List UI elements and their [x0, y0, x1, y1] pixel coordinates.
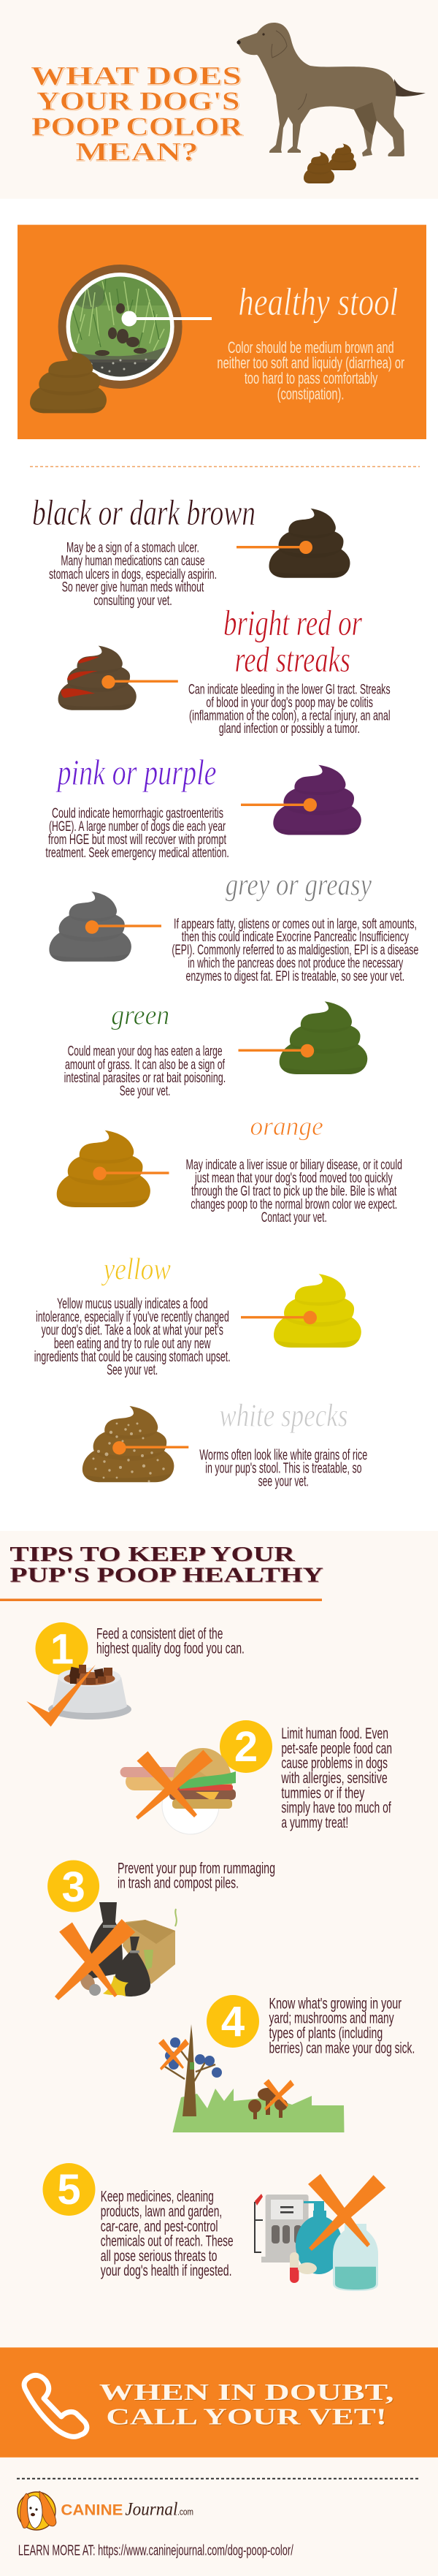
text block: white specks: see your vet. [258, 1473, 309, 1489]
text block: tip 2: with allergies, sensitive [281, 1770, 388, 1787]
heading: grey or greasy: grey or greasy [226, 869, 372, 903]
text block: tip 3 [118, 1860, 275, 1891]
icon: mushrooms [248, 2088, 288, 2119]
text block: green: See your vet. [120, 1083, 170, 1099]
icon: green poop [280, 1001, 367, 1074]
pointer: green poop [238, 1044, 314, 1057]
badge: 1 [35, 1622, 88, 1675]
text block: bright red [188, 681, 391, 737]
text block: black or dark brown: stomach ulcers in dogs, especially aspirin. [49, 566, 217, 582]
tip 4 [158, 1995, 415, 2132]
heading: bright red or red streaks: red streaks [235, 639, 350, 680]
icon: blue cleaner bottle [296, 2201, 342, 2274]
pointer: orange poop [93, 1166, 169, 1180]
text block: orange [185, 1157, 402, 1226]
text block: tip 3: in trash and compost piles. [118, 1874, 239, 1891]
heading: yellow: yellow [101, 1253, 171, 1287]
text block: green: Could mean your dog has eaten a large [68, 1044, 223, 1060]
pointer: grey poop [85, 920, 161, 934]
icon: yellow poop [274, 1274, 361, 1348]
icon: X on berries [158, 2039, 189, 2070]
text block: yellow: Yellow mucus usually indicates a food [57, 1296, 208, 1312]
heading: bright red or red streaks: bright red or [223, 602, 362, 643]
heading: tips [9, 1543, 323, 1587]
text block: tip 2: Limit human food. Even [281, 1725, 388, 1742]
icon: phone [24, 2375, 87, 2436]
icon: trash bags and box [77, 1902, 177, 1996]
heading: bright red or red streaks [223, 602, 362, 680]
text block: yellow: See your vet. [107, 1361, 158, 1378]
text block: pink or purple [45, 805, 229, 861]
text block: tip 1: Feed a consistent diet of the [96, 1625, 223, 1642]
text block: pink or purple: Could indicate hemorrhagic gastroenteritis [52, 805, 223, 821]
icon: grass [172, 2089, 345, 2132]
icon: dog food bowl [48, 1665, 131, 1720]
text block: green: amount of grass. It can also be a sign of [65, 1057, 225, 1073]
badge: 2 [220, 1720, 272, 1773]
heading: when in doubt [99, 2379, 394, 2429]
heading: when in doubt: CALL YOUR VET! [106, 2403, 387, 2429]
heading: black or dark brown: black or dark brown [32, 492, 256, 533]
text block: healthy stool [217, 338, 404, 403]
text: .com: .com [177, 2507, 193, 2518]
text block: yellow: intolerance, especially if you've recently changed [36, 1309, 229, 1326]
text block: tip 1: highest quality dog food you can. [96, 1641, 245, 1657]
title: WHAT DOES [31, 61, 242, 91]
icon: burger and hot dog [120, 1748, 236, 1834]
badge: 3: 3 [61, 1863, 85, 1911]
icon: orange check mark [26, 1665, 96, 1727]
text block: tip 2 [281, 1725, 392, 1831]
text block: white specks [199, 1446, 367, 1489]
text block: tip 5: Keep medicines, cleaning [101, 2189, 214, 2205]
text block: green: intestinal parasites or rat bait poisoning. [64, 1070, 226, 1086]
text block: grey or greasy [172, 916, 418, 984]
text block: tip 4: types of plants (including [269, 2025, 383, 2042]
pointer: red poop [101, 675, 178, 688]
text block: tip 2: tummies or if they [281, 1785, 365, 1801]
heading: when in doubt: WHEN IN DOUBT, [99, 2379, 394, 2405]
text block: pink or purple: (HGE). A large number of dogs die each year [49, 818, 226, 835]
pointer: black poop [237, 541, 312, 554]
icon: clear bottle [333, 2224, 378, 2291]
icon: pills [290, 2252, 317, 2283]
icon: healthy poop [30, 351, 107, 413]
pointer: healthy stool [121, 311, 212, 326]
icon: brown dog [237, 23, 426, 156]
icon: grey poop [49, 892, 131, 962]
text block: yellow: ingredients that could be causing stomach upset. [34, 1348, 231, 1365]
panel: orange [57, 1112, 402, 1226]
text block: green [64, 1044, 226, 1099]
tip 2 [120, 1720, 392, 1834]
text block: black or dark brown [49, 540, 217, 609]
icon: orange X [308, 2174, 385, 2251]
icon: red streak poop [58, 646, 137, 710]
icon: orange X [55, 1919, 135, 2000]
title [31, 61, 243, 167]
icon: X on mushrooms [264, 2079, 294, 2110]
badge: 5: 5 [57, 2166, 81, 2214]
text block: orange: Contact your vet. [261, 1209, 327, 1226]
text block: tip 5: all pose serious threats to [101, 2248, 217, 2265]
text block: healthy stool: (constipation). [277, 384, 345, 403]
text block: tip 2: a yummy treat! [281, 1815, 348, 1831]
text block: black or dark brown: May be a sign of a stomach ulcer. [66, 540, 199, 556]
text block: tip 5: your dog's health if ingested. [101, 2262, 232, 2279]
pointer: white specks poop [112, 1441, 188, 1455]
icon: purple poop [273, 765, 361, 835]
tip 1 [26, 1622, 245, 1727]
panel: green [64, 1000, 367, 1099]
badge: 5 [42, 2163, 95, 2216]
panel: black or dark brown [32, 492, 350, 609]
panel: header [0, 0, 438, 199]
panel: pink or purple [45, 752, 361, 861]
panel: healthy stool [18, 225, 426, 439]
icon: poop with white specks [82, 1406, 174, 1482]
panel: yellow [34, 1253, 361, 1378]
text block: black or dark brown: So never give human meds without [62, 580, 204, 596]
icon: black poop [269, 509, 350, 578]
heading: tips: PUP'S POOP HEALTHY [9, 1564, 323, 1587]
icon: orange poop [57, 1131, 150, 1207]
text block: tip 3: Prevent your pup from rummaging [118, 1860, 275, 1877]
title: MEAN? [75, 137, 199, 167]
heading: white specks: white specks [219, 1398, 347, 1434]
panel: white specks [82, 1398, 367, 1489]
panel: call your vet [0, 2347, 438, 2458]
heading: healthy stool: healthy stool [238, 280, 398, 324]
panel: tips background [0, 1531, 438, 2576]
icon: poop pile back [328, 143, 356, 170]
panel: bright red or red streaks [58, 602, 391, 737]
heading: pink or purple: pink or purple [55, 752, 217, 793]
tip 5 [42, 2163, 385, 2291]
text block: pink or purple: from HGE but most will recover with prompt [48, 832, 226, 848]
text block: tip 4 [269, 1995, 415, 2056]
heading: green: green [111, 1000, 169, 1030]
text: CANINE: CANINE [61, 2502, 123, 2519]
text block: yellow [34, 1296, 231, 1378]
text block: tip 5: car-care, and pest-control [101, 2218, 218, 2235]
tip 3 [47, 1860, 275, 2000]
badge: 3 [47, 1861, 99, 1912]
icon: basset hound [18, 2491, 56, 2530]
icon: fuel pump [255, 2194, 309, 2262]
icon: orange X [136, 1749, 213, 1820]
logo: Canine Journal [18, 2491, 193, 2530]
text block: bright red: gland infection or possibly a tumor. [219, 721, 360, 737]
title: YOUR DOG'S [36, 86, 239, 115]
heading: tips: TIPS TO KEEP YOUR [9, 1543, 296, 1566]
source link: LEARN MORE AT: https://www.caninejournal.com/dog-poop-color/ [18, 2543, 293, 2559]
text block: tip 5: chemicals out of reach. These [101, 2233, 234, 2249]
badge: 4: 4 [221, 1998, 245, 2045]
photo ring [58, 265, 182, 389]
icon: berry tree [165, 2024, 222, 2116]
text block: yellow: been eating and try to rule out any new [54, 1335, 211, 1352]
badge: 2: 2 [234, 1723, 258, 1771]
text block: pink or purple: treatment. Seek emergency medical attention. [45, 845, 229, 861]
text block: black or dark brown: Many human medications can cause [61, 553, 205, 569]
text block: tip 5: products, lawn and garden, [101, 2203, 222, 2220]
panel: grey or greasy [49, 869, 418, 984]
pointer: purple poop [241, 798, 317, 812]
badge: 4 [207, 1995, 259, 2048]
heading: orange: orange [250, 1112, 323, 1141]
badge: 1: 1 [50, 1626, 74, 1673]
text block: yellow: your dog's diet. Take a look at what your pet's [42, 1322, 223, 1339]
pointer: yellow poop [241, 1311, 317, 1324]
title: POOP COLOR [31, 112, 243, 141]
text: Journal: Journal [125, 2500, 177, 2520]
icon: poop pile front [304, 152, 334, 183]
text block: tip 1 [96, 1625, 245, 1657]
text block: black or dark brown: consulting your vet. [93, 593, 172, 609]
text block: tip 5 [101, 2189, 234, 2279]
